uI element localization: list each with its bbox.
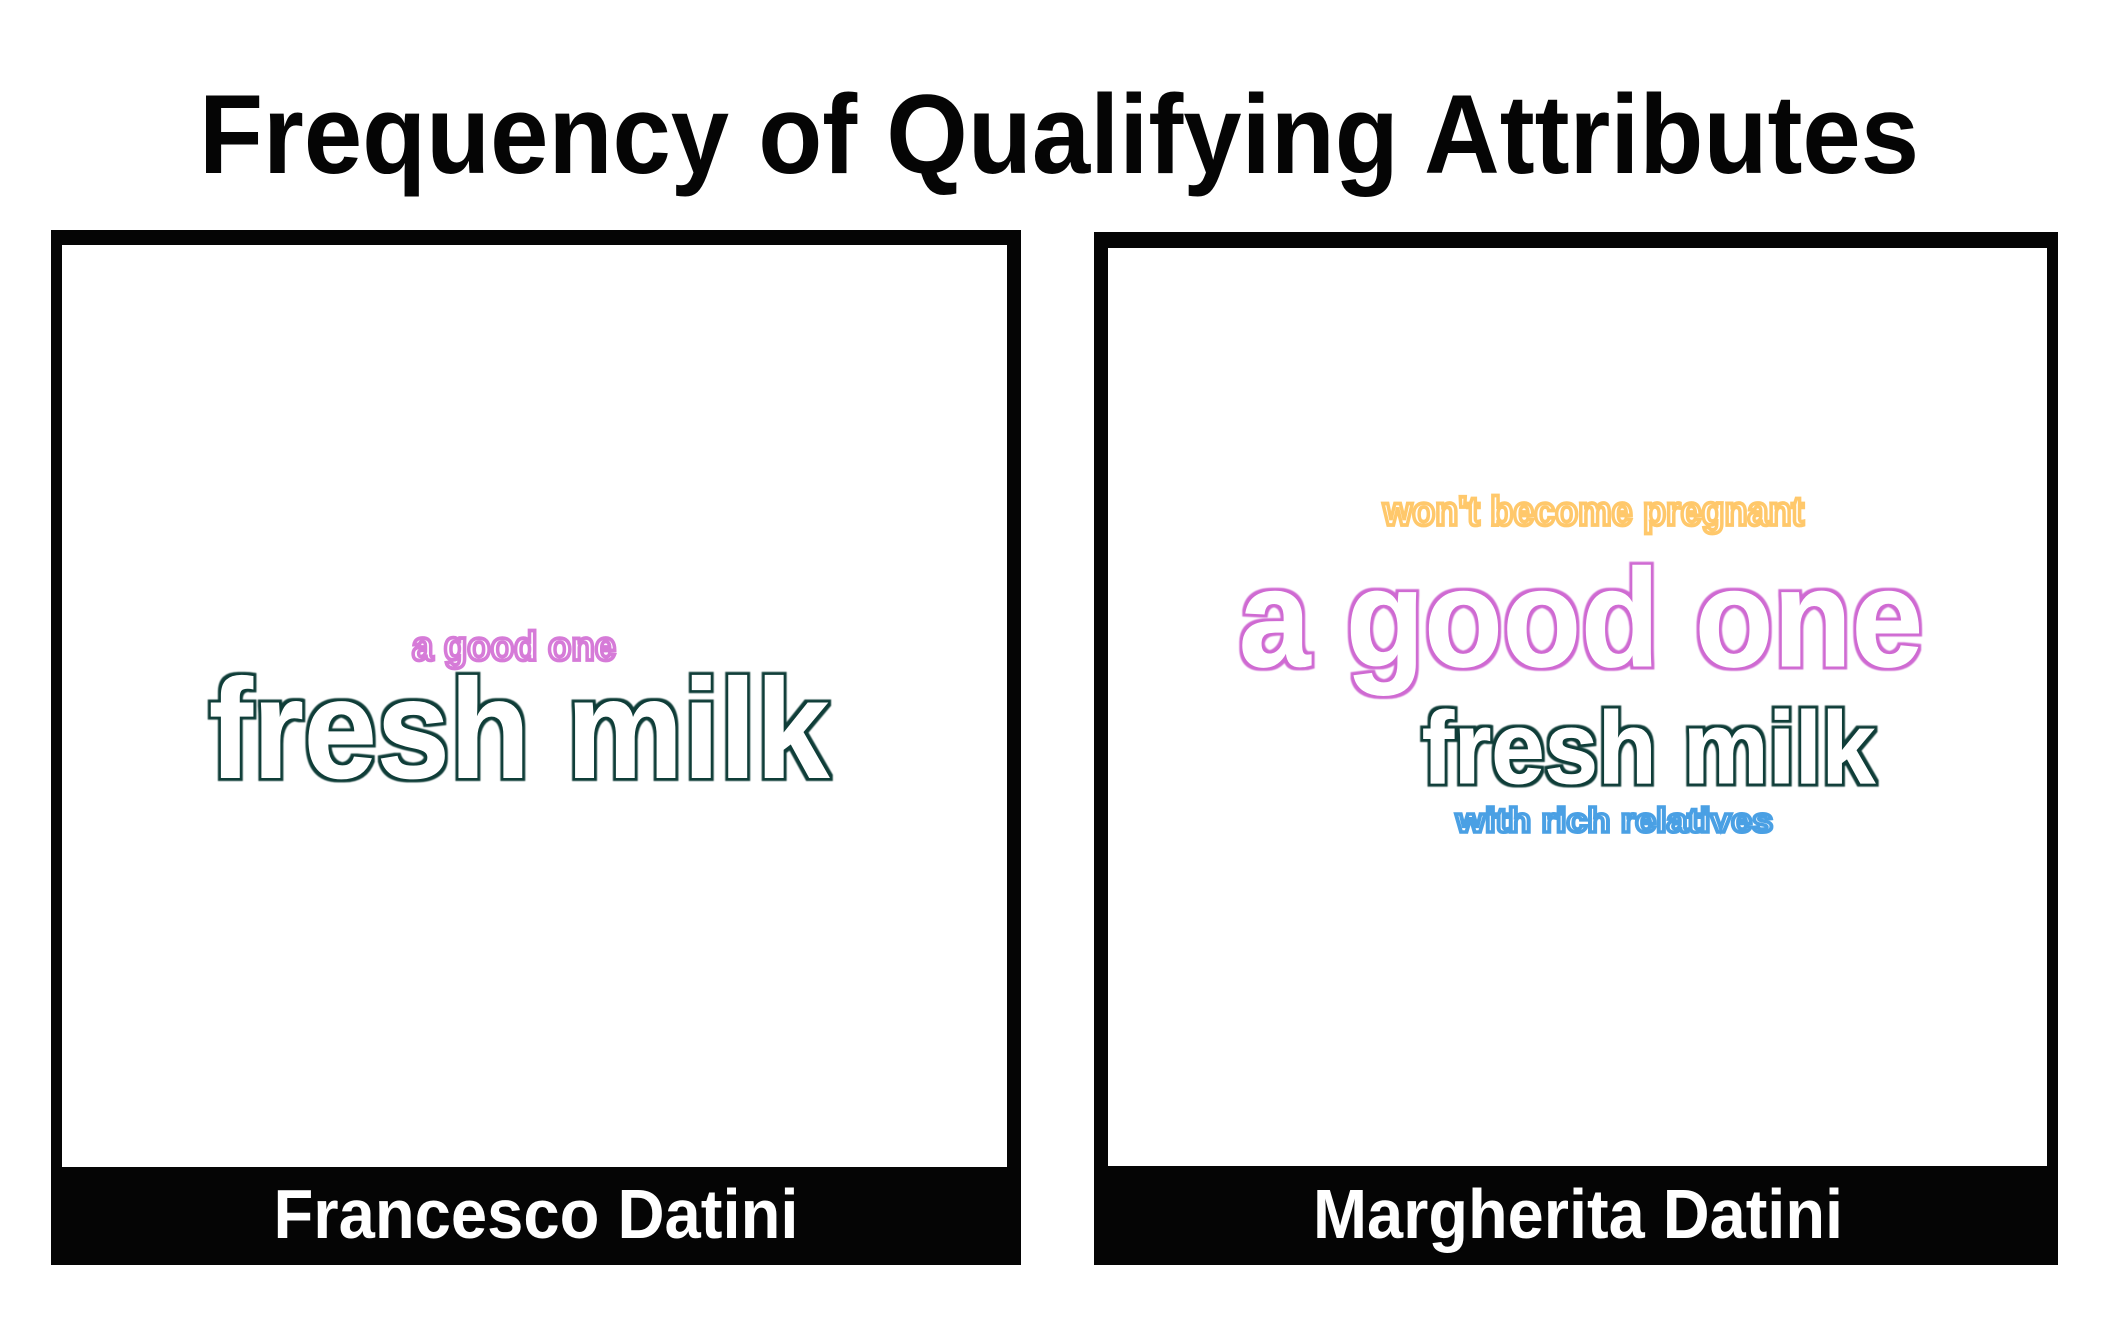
word: a good one: a good one xyxy=(1239,541,1923,696)
panel frame xyxy=(1094,232,2058,1265)
word: fresh milk: fresh milk xyxy=(1422,691,1875,805)
word: with rich relatives: with rich relatives xyxy=(1455,802,1773,840)
panel interior xyxy=(62,245,1007,1167)
panel: Margherita Datini xyxy=(1094,232,2058,1265)
panel label: Francesco Datini xyxy=(274,1175,798,1253)
title: Frequency of Qualifying Attributes xyxy=(199,72,1919,197)
panel label: Margherita Datini xyxy=(1313,1175,1843,1253)
panel: Francesco Datini xyxy=(51,230,1021,1265)
panel frame xyxy=(51,230,1021,1265)
word: fresh milk: fresh milk xyxy=(209,650,830,808)
word: won't become pregnant: won't become pregnant xyxy=(1382,488,1804,534)
panel interior xyxy=(1108,248,2047,1166)
word: a good one: a good one xyxy=(412,623,616,669)
